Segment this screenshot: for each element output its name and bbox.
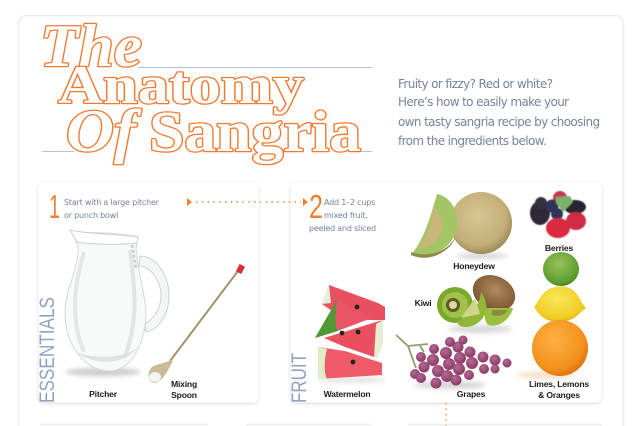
step 2 number: 2 [309, 188, 323, 225]
panel: essentials [36, 182, 258, 403]
title [40, 13, 361, 164]
step 2 text [309, 198, 376, 233]
icon: watermelon [315, 285, 386, 383]
title: Anatomy [58, 55, 304, 115]
intro text: own tasty sangria recipe by choosing [398, 115, 599, 129]
title: Of [66, 98, 142, 164]
icon: lime, lemon and orange [516, 252, 588, 379]
label: grapes: Grapes [457, 389, 486, 399]
label: honeydew: Honeydew [453, 261, 495, 271]
step 2 text: mixed fruit, [324, 211, 368, 220]
step 2 text: Add 1–2 cups [324, 198, 375, 207]
step 2 text: peeled and sliced [309, 224, 376, 233]
icon: kiwi [437, 268, 521, 333]
title: The [40, 13, 142, 79]
label: berries: Berries [545, 243, 574, 253]
intro text: Fruity or fizzy? Red or white? [398, 77, 553, 91]
heading: essentials: ESSENTIALS [36, 297, 59, 403]
arrow: step 1 to step 2 [187, 198, 308, 206]
step 1 text: or punch bowl [64, 211, 118, 220]
title: Sangria [149, 99, 361, 164]
step 1 number: 1 [49, 188, 60, 225]
icon: honeydew [411, 192, 512, 259]
label: mixing spoon [171, 379, 197, 400]
label: kiwi: Kiwi [415, 298, 431, 308]
arrow: fruit down [445, 403, 447, 426]
step 1 text: Start with a large pitcher [64, 198, 160, 207]
heading: fruit: FRUIT [288, 353, 311, 403]
label: limes, lemons and oranges: Limes, Lemons [529, 379, 589, 389]
label: limes, lemons and oranges [529, 379, 589, 400]
label: watermelon: Watermelon [324, 389, 370, 399]
label: pitcher: Pitcher [89, 389, 118, 399]
icon: grapes [396, 335, 512, 389]
panel: fruit [288, 182, 602, 403]
icon: pitcher [65, 230, 169, 376]
intro text: Here’s how to easily make your [398, 95, 569, 109]
icon: mixing spoon [148, 265, 244, 383]
next panels top edge [40, 424, 602, 426]
title rules [42, 68, 372, 152]
label: mixing spoon: Spoon [171, 390, 197, 400]
step 1 text [64, 198, 160, 220]
label: mixing spoon: Mixing [171, 379, 197, 389]
intro text [398, 77, 599, 148]
label: limes, lemons and oranges: & Oranges [538, 390, 580, 400]
icon: berries [530, 191, 586, 238]
intro text: from the ingredients below. [398, 134, 546, 148]
